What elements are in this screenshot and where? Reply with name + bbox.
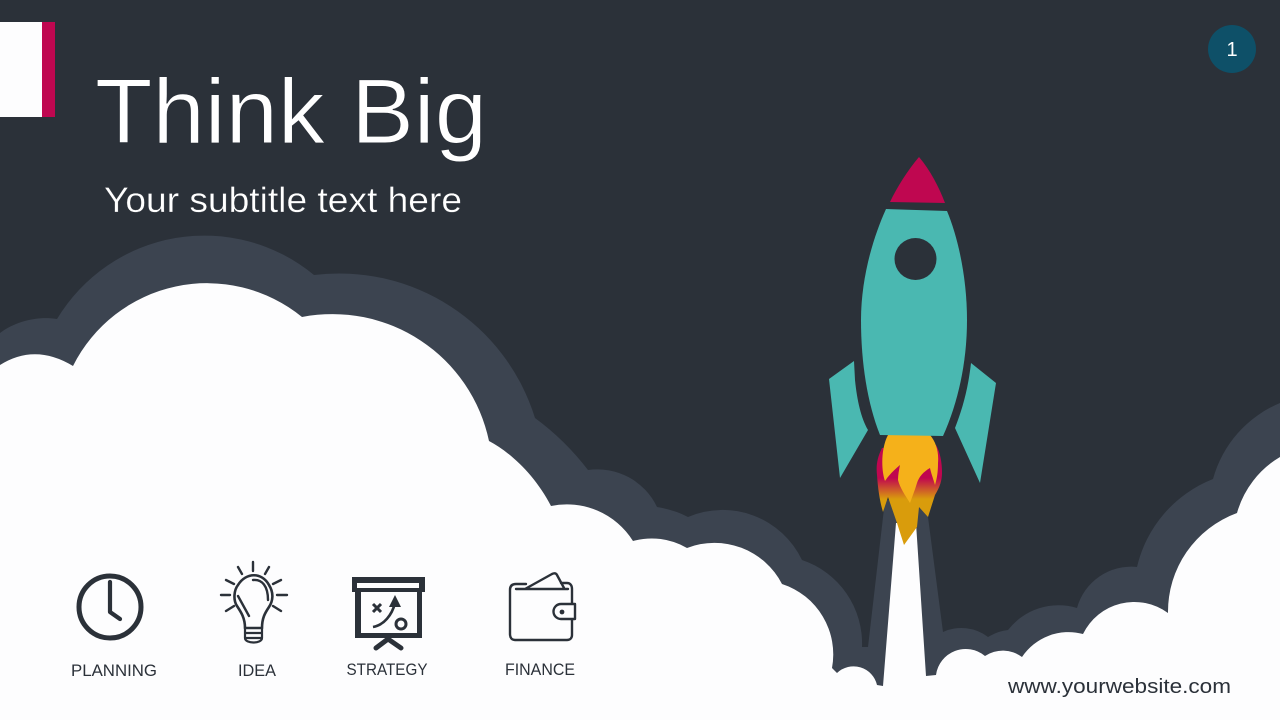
page number badge bbox=[1208, 25, 1256, 73]
label: idea: IDEA bbox=[238, 661, 277, 680]
website: www.yourwebsite.com bbox=[1007, 676, 1231, 698]
subtitle: Your subtitle text here bbox=[104, 181, 462, 220]
label: strategy: STRATEGY bbox=[346, 660, 428, 679]
icon: clock bbox=[79, 576, 141, 638]
white cloud layer bbox=[0, 283, 1280, 720]
title: Think Big bbox=[95, 61, 487, 163]
right fin bbox=[955, 363, 996, 483]
label: finance: FINANCE bbox=[505, 660, 575, 679]
icon: strategy board bbox=[352, 577, 425, 648]
rocket flame bbox=[877, 435, 942, 545]
label: planning: PLANNING bbox=[71, 661, 157, 680]
icon: wallet bbox=[510, 573, 575, 640]
rocket body bbox=[861, 209, 967, 436]
rocket window bbox=[894, 238, 936, 280]
page number badge: 1 bbox=[1226, 39, 1238, 61]
back cloud layer bbox=[0, 236, 1280, 720]
rocket bbox=[829, 157, 996, 545]
accent tab bbox=[0, 22, 55, 117]
left fin bbox=[829, 361, 868, 478]
rocket nose bbox=[890, 157, 945, 203]
icon: light bulb bbox=[221, 562, 287, 642]
